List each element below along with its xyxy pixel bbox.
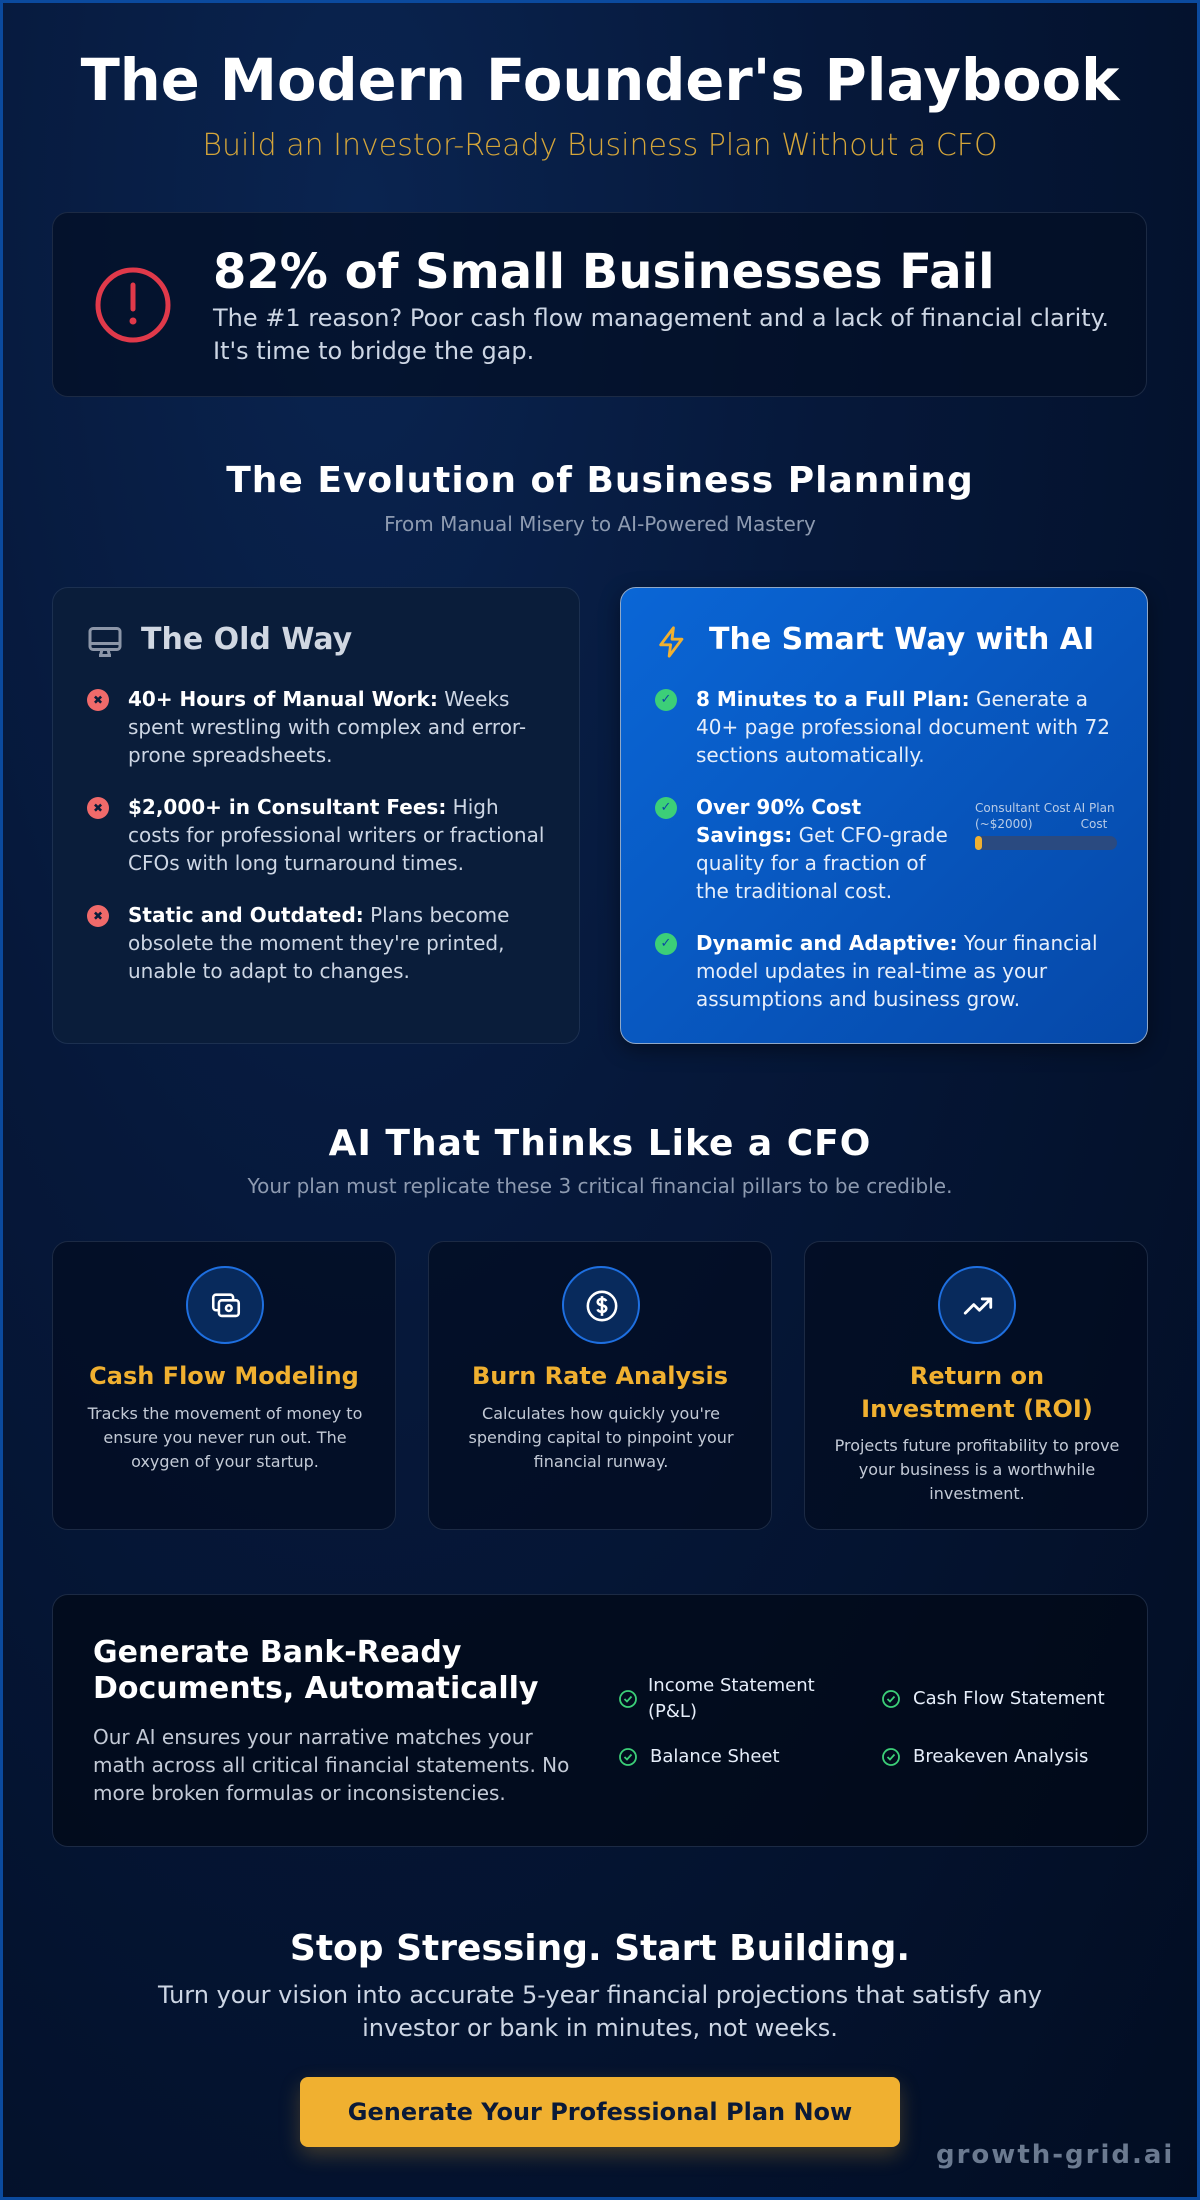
icon: warning [96,268,170,342]
panel: pillars [52,1241,1148,1530]
item 3: ✖ [93,909,103,923]
icon: cash [186,1266,264,1344]
bar chart: cost [975,801,1117,850]
item 3: Static and Outdated: Plans become obsolete the moment they're printed, unable to adapt to changes. [128,903,509,983]
title: The Modern Founder's Playbook [81,47,1119,114]
panel: bank-ready documents [52,1594,1148,1847]
bar chart: cost: (~$2000) [975,817,1033,831]
bar chart: cost: Cost [1081,817,1107,831]
item 2: $2,000+ in Consultant Fees: High costs for professional writers or fractional CFOs with long turnaround times. [128,795,544,875]
heading: old way: The Old Way [141,622,352,657]
pillar: burn rate [428,1241,772,1530]
icon: lightning [659,626,684,658]
item 1: ✓ [661,692,671,707]
item 3: ✓ [661,936,671,951]
button: Generate Your Professional Plan Now [348,2098,852,2126]
section subtitle: From Manual Misery to AI-Powered Mastery [384,512,816,536]
alert text: The #1 reason? Poor cash flow management and a lack of financial clarity. It's time to bridge the gap. [213,304,1109,365]
checklist: Balance Sheet [650,1746,780,1767]
heading: Generate Bank-Ready Documents, Automatically [93,1635,538,1706]
section subtitle: Your plan must replicate these 3 critical financial pillars to be credible. [248,1174,952,1198]
item 1: ✖ [93,693,103,707]
heading: smart way: The Smart Way with AI [709,622,1094,657]
pillar: ROI: Return on Investment (ROI) [861,1362,1093,1423]
checklist [619,1675,1105,1767]
panel: alert [52,212,1147,397]
pillar: ROI: Projects future profitability to prove your business is a worthwhile investment. [835,1436,1119,1503]
checklist: Cash Flow Statement [913,1688,1105,1709]
section heading: evolution: The Evolution of Business Planning [226,460,974,501]
subtitle: Build an Investor-Ready Business Plan Without a CFO [202,128,998,163]
icon: trend [938,1266,1016,1344]
item 1: 8 Minutes to a Full Plan: Generate a 40+ page professional document with 72 sections automatically. [696,687,1110,767]
watermark: growth-grid.ai [936,2140,1174,2170]
CTA heading: Stop Stressing. Start Building. [290,1928,910,1969]
item 2: ✓ [661,800,671,815]
pillar: ROI [804,1241,1148,1530]
checklist: Income Statement (P&L) [648,1675,815,1722]
section heading: CFO: AI That Thinks Like a CFO [329,1123,871,1164]
pillar: cash flow: Tracks the movement of money to ensure you never run out. The oxygen of your startup. [88,1404,362,1471]
pillar: cash flow [52,1241,396,1530]
icon: monitor [88,627,122,657]
CTA text: Turn your vision into accurate 5-year financial projections that satisfy any investor or bank in minutes, not weeks. [158,1981,1042,2042]
bar chart: cost: AI Plan [1073,801,1115,815]
item 1: 40+ Hours of Manual Work: Weeks spent wrestling with complex and error-prone spreadsheets. [128,687,526,767]
checklist: Breakeven Analysis [913,1746,1088,1767]
alert heading: 82% of Small Businesses Fail [213,244,995,300]
body: Our AI ensures your narrative matches your math across all critical financial statements. No more broken formulas or inconsistencies. [93,1725,569,1805]
icon: dollar [562,1266,640,1344]
bar chart: cost: Consultant Cost [975,801,1070,815]
button [300,2077,900,2147]
item 2: ✖ [93,801,103,815]
panel: smart way [620,587,1148,1044]
pillar: burn rate: Calculates how quickly you're spending capital to pinpoint your financial runway. [468,1404,734,1471]
item 3: Dynamic and Adaptive: Your financial model updates in real-time as your assumptions and business grow. [696,931,1098,1011]
panel: old way [52,587,580,1044]
pillar: cash flow: Cash Flow Modeling [89,1362,359,1390]
pillar: burn rate: Burn Rate Analysis [472,1362,728,1390]
item 2: Over 90% Cost Savings: Get CFO-grade quality for a fraction of the traditional cost. [696,795,948,903]
